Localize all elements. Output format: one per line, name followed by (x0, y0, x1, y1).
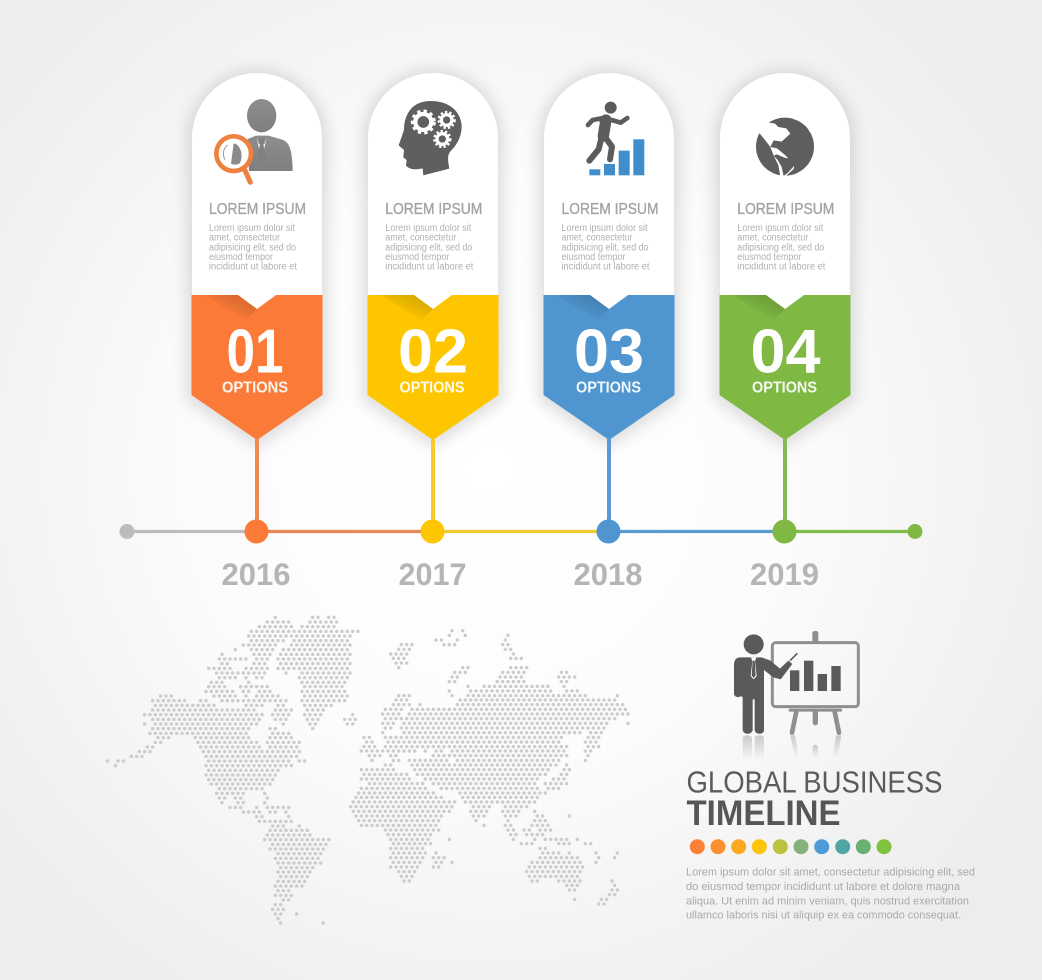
label: OPTIONS (400, 380, 465, 396)
icon: businessman with magnifier (216, 99, 293, 182)
paragraph: aliqua. Ut enim ad minim veniam, quis nostrud exercitation (686, 895, 969, 907)
reflection (743, 735, 841, 760)
arrow tag (720, 295, 850, 440)
text block (385, 223, 473, 273)
heading: LOREM IPSUM (737, 201, 834, 218)
text block: eiusmod tempor (385, 252, 450, 263)
text block: amet, consectetur (562, 233, 633, 244)
year labels (222, 556, 819, 592)
text block: adipisicing elit, sed do (737, 242, 825, 253)
number: 01 (226, 318, 284, 386)
year labels: 2018 (574, 556, 642, 592)
text block: incididunt ut labore et (562, 262, 650, 273)
text block (737, 223, 825, 273)
arrow tag (544, 295, 674, 440)
colour dots (690, 839, 892, 854)
year labels: 2016 (222, 556, 290, 592)
text block: adipisicing elit, sed do (209, 242, 296, 253)
text block: amet, consectetur (737, 233, 809, 244)
heading: LOREM IPSUM (385, 201, 482, 218)
heading: LOREM IPSUM (209, 201, 306, 218)
icon: man climbing bar chart (588, 102, 644, 175)
text block: eiusmod tempor (562, 252, 626, 263)
timeline (120, 438, 922, 544)
panel: option 04 card (714, 69, 856, 448)
arrow tag (192, 295, 322, 440)
text block: Lorem ipsum dolor sit (385, 223, 471, 234)
text block: adipisicing elit, sed do (385, 242, 473, 253)
text block: incididunt ut labore et (737, 262, 825, 273)
text block: Lorem ipsum dolor sit (737, 223, 823, 234)
text block (209, 223, 297, 273)
heading: LOREM IPSUM (562, 201, 658, 218)
text block: Lorem ipsum dolor sit (562, 223, 648, 234)
text block: Lorem ipsum dolor sit (209, 223, 295, 234)
number: 03 (574, 318, 644, 386)
icon: globe (752, 112, 822, 177)
number: 02 (398, 318, 468, 386)
text block: adipisicing elit, sed do (562, 242, 649, 253)
dotted world map (107, 617, 628, 923)
text block: amet, consectetur (209, 233, 281, 244)
panel: option 02 card (362, 69, 504, 448)
timeline nodes (120, 520, 922, 544)
title: TIMELINE (686, 794, 840, 833)
paragraph: Lorem ipsum dolor sit amet, consectetur adipisicing elit, sed (686, 867, 975, 879)
title (686, 764, 942, 833)
text block (562, 223, 650, 273)
paragraph: do eiusmod tempor incididunt ut labore et dolore magna (686, 881, 961, 893)
panel: option 03 card (538, 69, 680, 448)
icon: head with gears (399, 101, 462, 175)
paragraph: ullamco laboris nisi ut aliquip ex ea commodo consequat. (686, 910, 961, 922)
label: OPTIONS (222, 380, 288, 396)
text block: eiusmod tempor (209, 252, 274, 263)
title: GLOBAL BUSINESS (686, 764, 942, 800)
text block: eiusmod tempor (737, 252, 802, 263)
label: OPTIONS (576, 380, 641, 396)
paragraph (686, 867, 975, 922)
arrow tag (368, 295, 498, 440)
label: OPTIONS (752, 380, 817, 396)
text block: incididunt ut labore et (385, 262, 473, 273)
icon: presenter with chart board (734, 631, 858, 760)
text block: incididunt ut labore et (209, 262, 297, 273)
text block: amet, consectetur (385, 233, 457, 244)
number: 04 (750, 318, 821, 386)
panel: option 01 card (186, 69, 328, 448)
year labels: 2019 (750, 556, 819, 592)
year labels: 2017 (398, 556, 466, 592)
